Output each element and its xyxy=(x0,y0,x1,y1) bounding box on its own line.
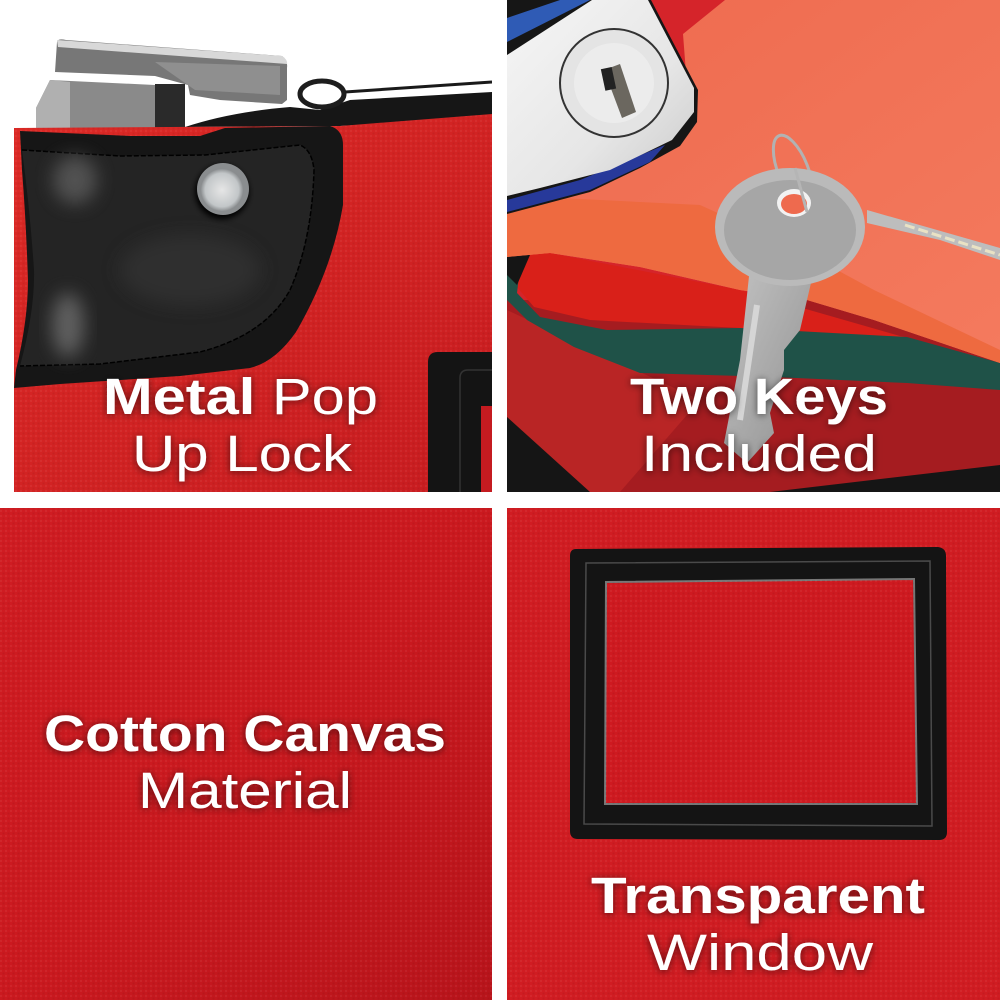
panel: transparent window xyxy=(507,508,1000,1000)
caption: Transparent Window: Window xyxy=(647,924,873,981)
icon: leather flap with rivet xyxy=(14,126,343,388)
icon: silver lock xyxy=(507,0,698,214)
zipper xyxy=(185,81,492,127)
panel: metal pop up lock xyxy=(14,39,492,492)
bright red bag xyxy=(507,250,910,338)
red canvas bag body xyxy=(14,114,492,492)
caption: Metal Pop Up Lock: Up Lock xyxy=(132,425,353,482)
coral bag xyxy=(507,0,1000,363)
window corner xyxy=(428,352,492,492)
caption: Metal Pop Up Lock xyxy=(103,368,378,482)
icon: window frame xyxy=(570,547,947,840)
panel: two keys included xyxy=(507,0,1000,492)
caption: Two Keys Included: Included xyxy=(641,425,877,482)
black bag xyxy=(507,417,1000,492)
icon: keys xyxy=(715,130,1000,463)
caption: Transparent Window: Transparent xyxy=(591,867,925,924)
panel: cotton canvas material xyxy=(0,508,492,1000)
caption: Cotton Canvas Material: Cotton Canvas xyxy=(44,705,446,762)
lower dark red bag xyxy=(507,300,1000,492)
caption: Two Keys Included xyxy=(630,368,888,482)
caption: Cotton Canvas Material xyxy=(44,705,446,819)
caption: Metal Pop Up Lock: Metal Pop xyxy=(103,368,378,425)
caption: Cotton Canvas Material: Material xyxy=(138,762,352,819)
green bag xyxy=(507,275,1000,390)
icon: metal lock xyxy=(36,39,287,130)
caption: Two Keys Included: Two Keys xyxy=(630,368,888,425)
base red fill xyxy=(517,0,748,300)
caption: Transparent Window xyxy=(591,867,925,981)
